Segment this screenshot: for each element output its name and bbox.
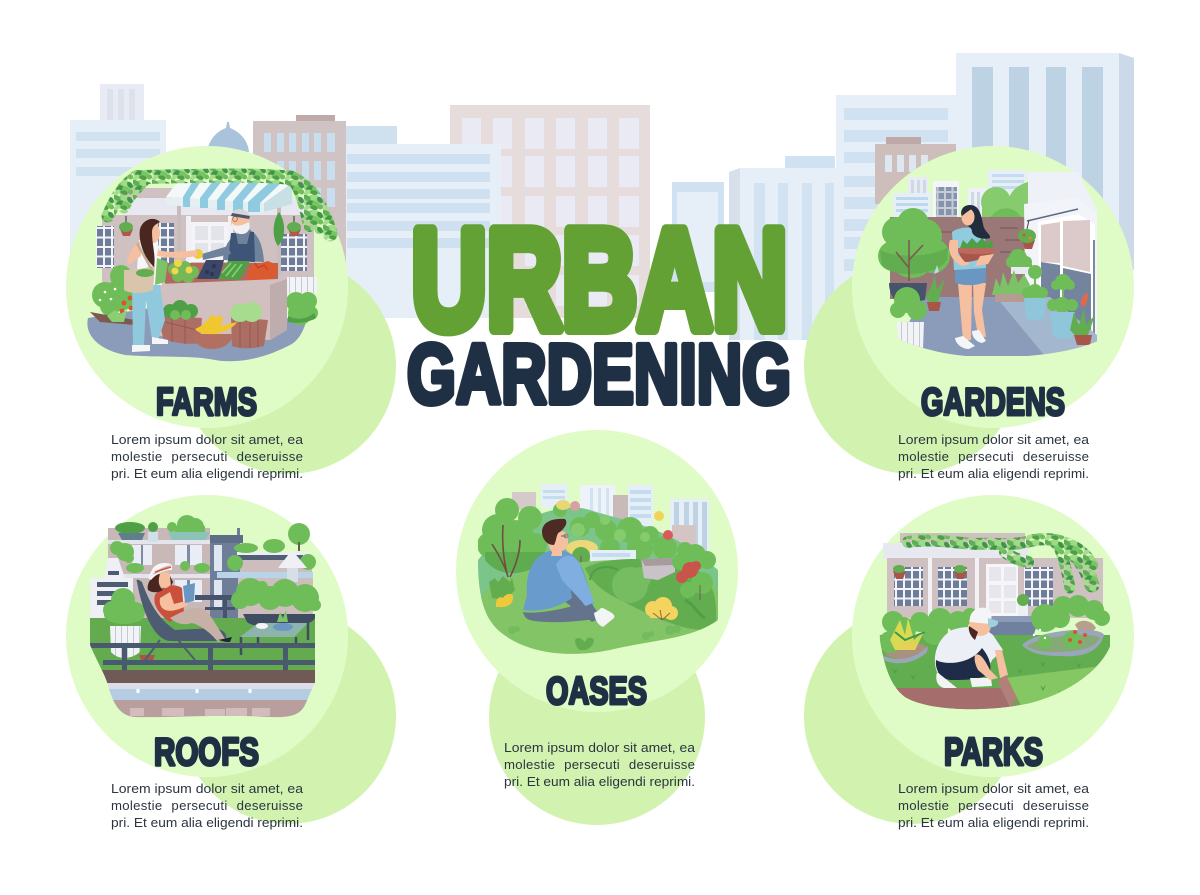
illustration: rooftop garden: [878, 170, 1097, 356]
building: tall tower: [956, 53, 1134, 273]
text: oases body: Lorem ipsum dolor sit amet, ea: [504, 740, 696, 755]
illustration: roof terrace: [90, 515, 321, 718]
text: parks body: molestie persecuti deseruisse: [898, 798, 1089, 813]
illustration: city park view: [477, 484, 720, 660]
text: oases body: [504, 740, 696, 789]
text: roofs body: [111, 781, 304, 830]
front circle: [852, 495, 1134, 777]
building: left tower: [70, 84, 166, 320]
back circle: [180, 608, 396, 824]
skyline background: [70, 53, 1134, 340]
building: wide office block: [346, 126, 501, 318]
front circle: [66, 495, 348, 777]
heading: parks: PARKS: [944, 731, 1043, 774]
illustration: lawn laying: [876, 533, 1110, 715]
building: small framed block: [672, 182, 724, 292]
building: large beige block: [450, 105, 650, 318]
building: brown block: [253, 115, 346, 291]
front circle: [456, 430, 738, 712]
title: [407, 200, 791, 421]
illustration: market stall: [87, 175, 330, 361]
back circle: [804, 608, 1020, 824]
building: mid tower: [836, 95, 957, 300]
back circle: [180, 258, 396, 474]
text: farms body: [111, 432, 304, 481]
heading: oases: OASES: [546, 670, 647, 713]
panel: roofs: [66, 495, 396, 830]
panel: farms: [66, 146, 396, 481]
awning: [166, 181, 292, 212]
heading: farms: FARMS: [156, 381, 257, 424]
building: dome: [207, 122, 249, 152]
text: gardens body: pri. Et eum alia eligendi reprimi.: [898, 466, 1089, 481]
panel: parks: [804, 495, 1134, 830]
text: parks body: Lorem ipsum dolor sit amet, ea: [898, 781, 1090, 796]
text: farms body: pri. Et eum alia eligendi reprimi.: [111, 466, 303, 481]
title word: urban: URBAN: [412, 200, 788, 360]
building: lower tower: [729, 156, 837, 340]
text: oases body: pri. Et eum alia eligendi reprimi.: [504, 774, 695, 789]
heading: gardens: GARDENS: [921, 381, 1065, 424]
panel: oases: [456, 430, 738, 825]
back circle: [489, 609, 705, 825]
text: parks body: pri. Et eum alia eligendi reprimi.: [898, 815, 1089, 830]
vines: [908, 539, 1092, 588]
text: roofs body: pri. Et eum alia eligendi reprimi.: [111, 815, 303, 830]
text: gardens body: molestie persecuti deseruisse: [898, 449, 1089, 464]
panel: gardens: [804, 146, 1134, 481]
front circle: [66, 146, 348, 428]
text: gardens body: Lorem ipsum dolor sit amet, ea: [898, 432, 1090, 447]
front circle: [852, 146, 1134, 428]
text: farms body: molestie persecuti deseruisse: [111, 449, 303, 464]
heading: roofs: ROOFS: [154, 731, 259, 774]
text: gardens body: [898, 432, 1090, 481]
text: roofs body: molestie persecuti deseruisse: [111, 798, 303, 813]
text: roofs body: Lorem ipsum dolor sit amet, ea: [111, 781, 304, 796]
vines: [108, 175, 330, 234]
back circle: [804, 258, 1020, 474]
text: parks body: [898, 781, 1090, 830]
text: farms body: Lorem ipsum dolor sit amet, ea: [111, 432, 304, 447]
building: brown block right: [875, 137, 960, 204]
text: oases body: molestie persecuti deseruisse: [504, 757, 695, 772]
title word: gardening: GARDENING: [407, 327, 791, 421]
